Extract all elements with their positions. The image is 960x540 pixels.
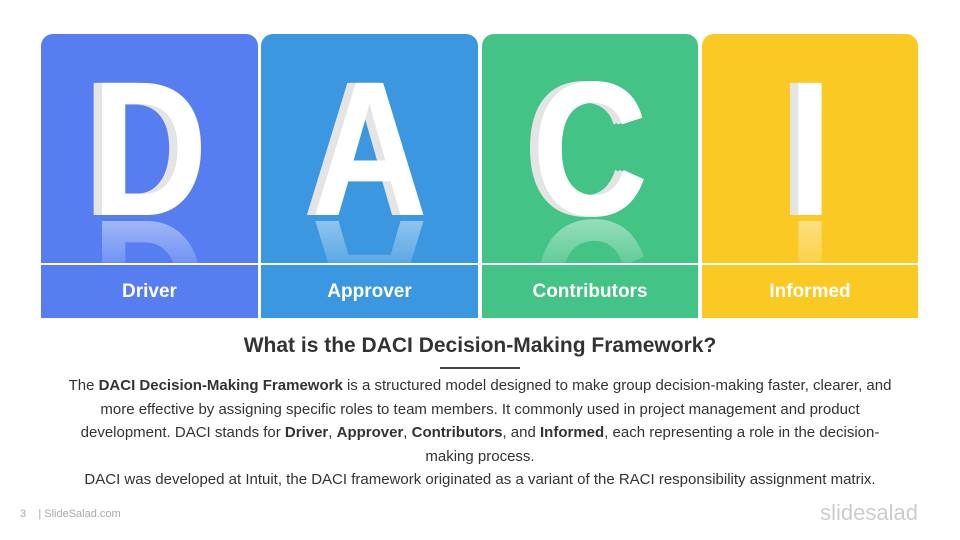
letter C: C xyxy=(532,41,648,256)
label: Contributors xyxy=(482,265,698,318)
footer: 3 | SlideSalad.com xyxy=(20,508,121,520)
letter A: A xyxy=(311,41,428,256)
title underline xyxy=(440,367,520,369)
body text: DACI was developed at Intuit, the DACI framework originated as a variant of the RACI responsibility assignment matrix. xyxy=(84,471,876,488)
label: Driver: Driver xyxy=(122,281,177,302)
letter D: D xyxy=(91,41,208,256)
letter I: I xyxy=(788,41,832,256)
panel: Informed xyxy=(702,34,918,318)
panel: Driver xyxy=(41,34,258,318)
panel: Approver xyxy=(261,34,478,318)
label: Approver: Approver xyxy=(327,281,412,302)
panel: Contributors xyxy=(482,34,698,318)
label: Driver xyxy=(41,265,258,318)
logo: slidesalad xyxy=(820,500,918,525)
label: Informed: Informed xyxy=(769,281,851,302)
label: Informed xyxy=(702,265,918,318)
body text: The DACI Decision-Making Framework is a structured model designed to make group decision-making faster, clearer, and more effective by assigning specific roles to team members. It commonly used in project management and product development. DACI stands for Driver, Approver, Contributors, and Informed, each representing a role in the decision-making process. xyxy=(69,377,891,464)
title: What is the DACI Decision-Making Framework? xyxy=(244,334,716,357)
label: Approver xyxy=(261,265,478,318)
label: Contributors: Contributors xyxy=(532,281,648,302)
